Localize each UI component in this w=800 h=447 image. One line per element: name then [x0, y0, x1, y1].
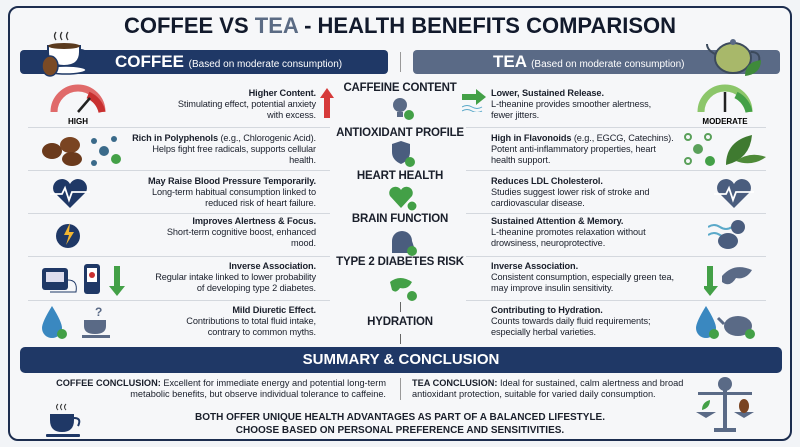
coffee text brain: [167, 216, 316, 248]
tea text heart: cardiovascular disease.: [491, 198, 585, 208]
tea text brain: drowsiness, neuroprotective.: [491, 238, 605, 248]
coffee text hydration: [186, 305, 316, 337]
coffee text heart: May Raise Blood Pressure Temporarily.: [148, 176, 316, 186]
tea text antioxidant: health support.: [491, 155, 550, 165]
tea text brain: L-theanine promotes relaxation without: [491, 227, 646, 237]
tea text diabetes: may improve insulin sensitivity.: [491, 283, 613, 293]
coffee text antioxidant: Rich in Polyphenols (e.g., Chlorogenic Acid).: [132, 133, 316, 143]
coffee banner: [20, 50, 388, 74]
bottom statement: BOTH OFFER UNIQUE HEALTH ADVANTAGES AS PART OF A BALANCED LIFESTYLE.: [195, 412, 605, 423]
icon: heart coffee: [50, 179, 90, 208]
row6 hydration: [42, 302, 755, 344]
coffee text diabetes: Regular intake linked to lower probability: [155, 272, 316, 282]
icon: bottom coffee cup: [44, 402, 88, 438]
row2 antioxidant: [42, 127, 766, 167]
coffee text antioxidant: [132, 133, 316, 165]
icon: tea brain waves: [708, 220, 745, 249]
row3 heart: [50, 170, 754, 212]
label hydration: HYDRATION: [367, 316, 433, 328]
tea text heart: [491, 176, 649, 208]
icon: high gauge: [50, 84, 106, 124]
icon: shield: [392, 141, 415, 167]
coffee text hydration: contrary to common myths.: [208, 327, 316, 337]
icon: green heart: [389, 186, 418, 212]
tea text antioxidant: Potent anti-inflammatory properties, heart: [491, 144, 656, 154]
title: COFFEE VS TEA - HEALTH BENEFITS COMPARISON: [124, 13, 676, 38]
row1 caffeine: [50, 82, 752, 124]
icon: molecule leaf: [684, 133, 766, 166]
tea text caffeine: [491, 88, 651, 120]
icon: brain lightning: [56, 223, 80, 248]
icon: drop cup: ?: [95, 305, 102, 319]
row5 diabetes: [42, 256, 752, 301]
label heart: HEART HEALTH: [357, 170, 443, 182]
bottom statement: [150, 411, 650, 437]
icon: drop teapot: [696, 306, 755, 339]
coffee banner: COFFEE (Based on moderate consumption): [115, 52, 342, 71]
coffee text diabetes: Inverse Association.: [229, 261, 316, 271]
tea text brain: Sustained Attention & Memory.: [491, 216, 623, 226]
icon: moderate gauge: [698, 84, 752, 124]
coffee text antioxidant: Helps fight free radicals, supports cellular: [152, 144, 316, 154]
icon: heart tea: [714, 179, 754, 208]
icon: head gears: [392, 231, 417, 256]
summary banner: [20, 347, 782, 373]
coffee text antioxidant: health.: [289, 155, 316, 165]
tea text antioxidant: High in Flavonoids (e.g., EGCG, Catechins).: [491, 133, 674, 143]
tea text hydration: Contributing to Hydration.: [491, 305, 603, 315]
icon: coffee cup: [42, 32, 86, 77]
label brain: BRAIN FUNCTION: [352, 213, 448, 225]
bottom statement: CHOOSE BASED ON PERSONAL PREFERENCE AND SENSITIVITIES.: [236, 425, 564, 436]
tea text brain: [491, 216, 646, 248]
coffee text brain: mood.: [291, 238, 316, 248]
tea text hydration: especially herbal varieties.: [491, 327, 596, 337]
tea banner: TEA (Based on moderate consumption): [493, 52, 685, 71]
tea text caffeine: fewer jitters.: [491, 110, 539, 120]
tea text heart: Reduces LDL Cholesterol.: [491, 176, 603, 186]
coffee conclusion: COFFEE CONCLUSION: Excellent for immediate energy and potential long-term metabolic benefits, but observe individual tolerance to caffeine.: [56, 378, 386, 399]
coffee text hydration: Contributions to total fluid intake,: [186, 316, 316, 326]
coffee text heart: [148, 176, 316, 208]
icon: scale: [694, 376, 756, 436]
coffee text caffeine: with excess.: [267, 110, 316, 120]
summary banner: SUMMARY & CONCLUSION: [303, 351, 499, 368]
icon: bulb: [393, 98, 414, 120]
coffee text caffeine: [178, 88, 316, 120]
coffee text caffeine: Stimulating effect, potential anxiety: [178, 99, 316, 109]
coffee text brain: Short-term cognitive boost, enhanced: [167, 227, 316, 237]
icon: down arrow pancreas: [704, 266, 752, 296]
coffee text brain: Improves Alertness & Focus.: [192, 216, 316, 226]
icon: glucose meter: [42, 264, 125, 296]
coffee text hydration: Mild Diuretic Effect.: [232, 305, 316, 315]
icon: coffee beans: [42, 136, 121, 166]
tea text caffeine: Lower, Sustained Release.: [491, 88, 604, 98]
tea text diabetes: Inverse Association.: [491, 261, 578, 271]
icon: green arrow: [462, 89, 486, 112]
tea text hydration: Counts towards daily fluid requirements;: [491, 316, 650, 326]
coffee text diabetes: [155, 261, 316, 293]
tea text hydration: [491, 305, 650, 337]
tea text diabetes: [491, 261, 674, 293]
row4 brain: [56, 213, 745, 256]
coffee text caffeine: Higher Content.: [249, 88, 316, 98]
tea text caffeine: L-theanine provides smoother alertness,: [491, 99, 651, 109]
tea text antioxidant: [491, 133, 674, 165]
label caffeine: CAFFEINE CONTENT: [343, 82, 457, 94]
tea text heart: Studies suggest lower risk of stroke and: [491, 187, 649, 197]
icon: drop cup: [42, 305, 110, 339]
tea banner: [413, 50, 780, 74]
coffee text heart: reduced risk of heart failure.: [205, 198, 316, 208]
coffee text heart: Long-term habitual consumption linked to: [152, 187, 316, 197]
icon: red up arrow: [320, 88, 334, 118]
icon: teapot: [706, 39, 761, 76]
tea text diabetes: Consistent consumption, especially green tea,: [491, 272, 674, 282]
coffee text diabetes: of developing type 2 diabetes.: [197, 283, 316, 293]
label antioxidant: ANTIOXIDANT PROFILE: [336, 127, 464, 139]
icon: pancreas: [390, 278, 417, 301]
label diabetes: TYPE 2 DIABETES RISK: [336, 256, 464, 268]
tea conclusion: TEA CONCLUSION: Ideal for sustained, calm alertness and broad antioxidant protection, suitable for varied daily consumption.: [412, 378, 683, 399]
